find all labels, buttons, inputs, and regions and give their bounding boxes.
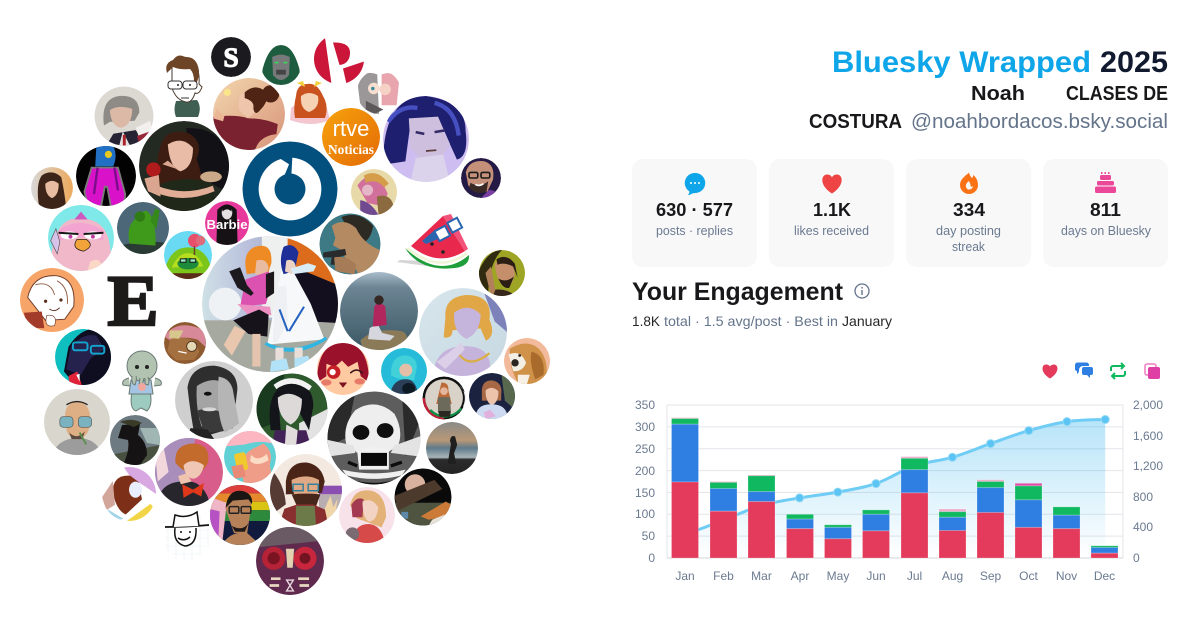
month labels: Apr <box>791 569 809 583</box>
left axis labels: 350 <box>635 398 655 412</box>
avatar: pixel red-haired girl <box>290 81 330 124</box>
card: likes received <box>769 159 894 267</box>
month labels: Nov <box>1056 569 1077 583</box>
avatar: red haired anime face <box>317 343 369 395</box>
month labels: Jul <box>907 569 922 583</box>
bar: Dec <box>1091 546 1118 558</box>
avatar: bald man with blue glasses <box>44 389 110 455</box>
icon: chat bubble <box>685 173 705 195</box>
month labels: May <box>827 569 849 583</box>
right axis labels: 400 <box>1133 520 1153 534</box>
avatar: small portrait of woman <box>31 167 73 209</box>
month labels: Feb <box>713 569 734 583</box>
left axis labels <box>635 398 655 565</box>
display name and handle: @noahbordacos.bsky.social <box>911 111 1168 133</box>
card: posts and replies: 630 · 577 <box>656 200 733 220</box>
heading: Your Engagement: Your Engagement <box>632 278 844 306</box>
engagement summary: total · 1.5 avg/post · Best in <box>664 313 838 329</box>
avatar: vader with glasses <box>55 329 111 385</box>
card: posting streak: 334 <box>953 200 985 220</box>
left axis labels: 100 <box>635 507 655 521</box>
bar: Sep <box>977 480 1004 558</box>
avatar: pixel purple character <box>76 146 136 206</box>
icon: flame <box>960 172 978 194</box>
card: posts and replies: posts · replies <box>656 223 733 238</box>
month labels: Oct <box>1019 569 1038 583</box>
avatar: dark horse painting <box>110 415 160 465</box>
bar: May <box>824 525 852 558</box>
right axis labels: 0 <box>1133 551 1140 565</box>
avatar: rtve Noticias logo <box>322 108 380 166</box>
avatar: painted profile with gun <box>320 214 380 274</box>
avatar: Barbie badge <box>205 201 249 245</box>
avatar: pony character <box>351 169 397 215</box>
bar: Mar <box>748 475 775 558</box>
avatar: bearded man on yellow <box>479 250 525 296</box>
chart grid and frame <box>667 405 1123 558</box>
month labels <box>675 569 1115 583</box>
right axis labels: 2,000 <box>1133 398 1163 412</box>
avatar cluster <box>20 34 550 595</box>
avatar: rainbow background man <box>210 485 270 545</box>
bar: Apr <box>786 514 814 558</box>
avatar: woman with apple <box>139 121 229 211</box>
icon: cake <box>1095 172 1116 193</box>
stacked bars <box>672 418 1118 558</box>
card: days on Bluesky <box>1043 159 1168 267</box>
card: likes received: likes received <box>794 223 869 238</box>
right axis labels: 800 <box>1133 490 1153 504</box>
avatar: kermit in rain <box>117 202 169 254</box>
avatar: woman in hoodie <box>469 373 515 419</box>
avatar: rtve Noticias logo: Noticias <box>328 142 374 157</box>
avatar: E logo: E <box>108 261 158 341</box>
right axis labels <box>1133 398 1163 565</box>
avatar: hat doodle <box>165 512 210 560</box>
right axis labels: 1,200 <box>1133 459 1163 473</box>
avatar: skull <box>328 392 420 484</box>
avatar: black and white man with hand <box>175 361 253 439</box>
avatar: silent hill pyramid head <box>394 468 452 526</box>
avatar: cosplayer with red bow <box>155 438 223 506</box>
avatar: cartoon man with glasses <box>166 56 202 117</box>
left axis labels: 300 <box>635 420 655 434</box>
avatar: Barbie badge: Barbie <box>206 217 248 232</box>
header <box>809 46 1168 133</box>
month labels: Jan <box>675 569 695 583</box>
title: Bluesky Wrapped <box>832 46 1091 79</box>
avatar: cosplayers in pink and white <box>202 236 338 372</box>
engagement chart <box>635 398 1163 583</box>
avatar: red P logo <box>314 38 364 83</box>
avatar: dark green hooded mask <box>261 45 301 85</box>
bar: Jan <box>672 418 698 558</box>
avatar: blue haired illustrated face <box>383 96 469 182</box>
month labels: Mar <box>751 569 772 583</box>
legend: reposts arrows <box>1111 363 1125 379</box>
avatar: beach silhouette <box>426 422 478 474</box>
avatar: maid with dark hair <box>256 374 328 444</box>
avatar: S logo <box>211 37 251 77</box>
avatar: redhead mirror selfie <box>422 376 466 420</box>
card: days on Bluesky: days on Bluesky <box>1061 223 1151 238</box>
avatar: furby illustration <box>48 205 114 271</box>
bar: Feb <box>710 482 737 558</box>
avatar: blue logo <box>242 142 338 236</box>
bar: Aug <box>939 509 966 558</box>
chart legend <box>1043 362 1160 379</box>
avatar: red eyes mask <box>256 527 324 595</box>
display name and handle: Noah <box>971 83 1025 105</box>
bar: Nov <box>1053 507 1080 558</box>
avatar: watermelon with glasses <box>397 214 469 269</box>
left axis labels: 150 <box>635 486 655 500</box>
avatar: two pixel characters <box>358 72 399 114</box>
title: 2025 <box>1100 46 1168 79</box>
icon: info <box>855 284 869 298</box>
avatar: small cthulhu <box>123 351 161 411</box>
card: posting streak: streak <box>952 239 985 254</box>
legend: replies bubbles <box>1075 362 1093 378</box>
avatar: crown man illustration <box>270 454 342 526</box>
month labels: Dec <box>1094 569 1115 583</box>
avatar: woman with hair bun <box>213 78 285 150</box>
bar: Jun <box>862 510 890 558</box>
card: days on Bluesky: 811 <box>1090 200 1121 220</box>
legend: quotes copy <box>1145 364 1160 379</box>
avatar: golden dog <box>504 338 550 384</box>
display name and handle: CLASES DE <box>1066 83 1168 105</box>
avatar: S logo: S <box>223 43 239 73</box>
month labels: Sep <box>980 569 1001 583</box>
card: posting streak <box>906 159 1031 267</box>
card: likes received: 1.1K <box>813 200 851 220</box>
engagement summary: 1.8K <box>632 313 661 329</box>
avatar: blonde illustrated woman <box>419 288 507 376</box>
left axis labels: 0 <box>648 551 655 565</box>
avatar: gray haired cosplayer <box>94 86 154 146</box>
cumulative line <box>685 420 1105 533</box>
avatar: teal hair cosplayer <box>381 348 427 394</box>
engagement summary: January <box>842 313 892 329</box>
month labels: Aug <box>942 569 963 583</box>
engagement summary <box>632 313 892 329</box>
display name and handle: COSTURA <box>809 111 902 133</box>
card: posting streak: day posting <box>936 223 1001 238</box>
display name and handle <box>809 83 1168 133</box>
right axis labels: 1,600 <box>1133 429 1163 443</box>
avatar: green character on hill <box>164 231 212 279</box>
cumulative area <box>685 420 1105 558</box>
bar: Jul <box>901 457 928 558</box>
avatar: bald man with glasses <box>461 158 501 198</box>
avatar: rtve Noticias logo: rtve <box>333 116 369 141</box>
legend: likes heart <box>1043 364 1057 378</box>
avatar: brown illustrated girl <box>164 322 206 364</box>
bar: Oct <box>1015 483 1042 558</box>
avatar: brown character with pencil <box>102 467 156 526</box>
cumulative points <box>796 416 1109 502</box>
left axis labels: 250 <box>635 442 655 456</box>
icon: heart <box>822 174 842 194</box>
stat cards <box>632 159 1168 267</box>
month labels: Jun <box>866 569 886 583</box>
left axis labels: 200 <box>635 464 655 478</box>
avatar: sea with person on rock <box>340 272 418 350</box>
left axis labels: 50 <box>642 529 655 543</box>
avatar: otter selfie <box>224 431 276 483</box>
avatar: orange coffee character <box>20 268 84 332</box>
avatar: pink painted woman <box>339 487 395 543</box>
card: posts and replies <box>632 159 757 267</box>
